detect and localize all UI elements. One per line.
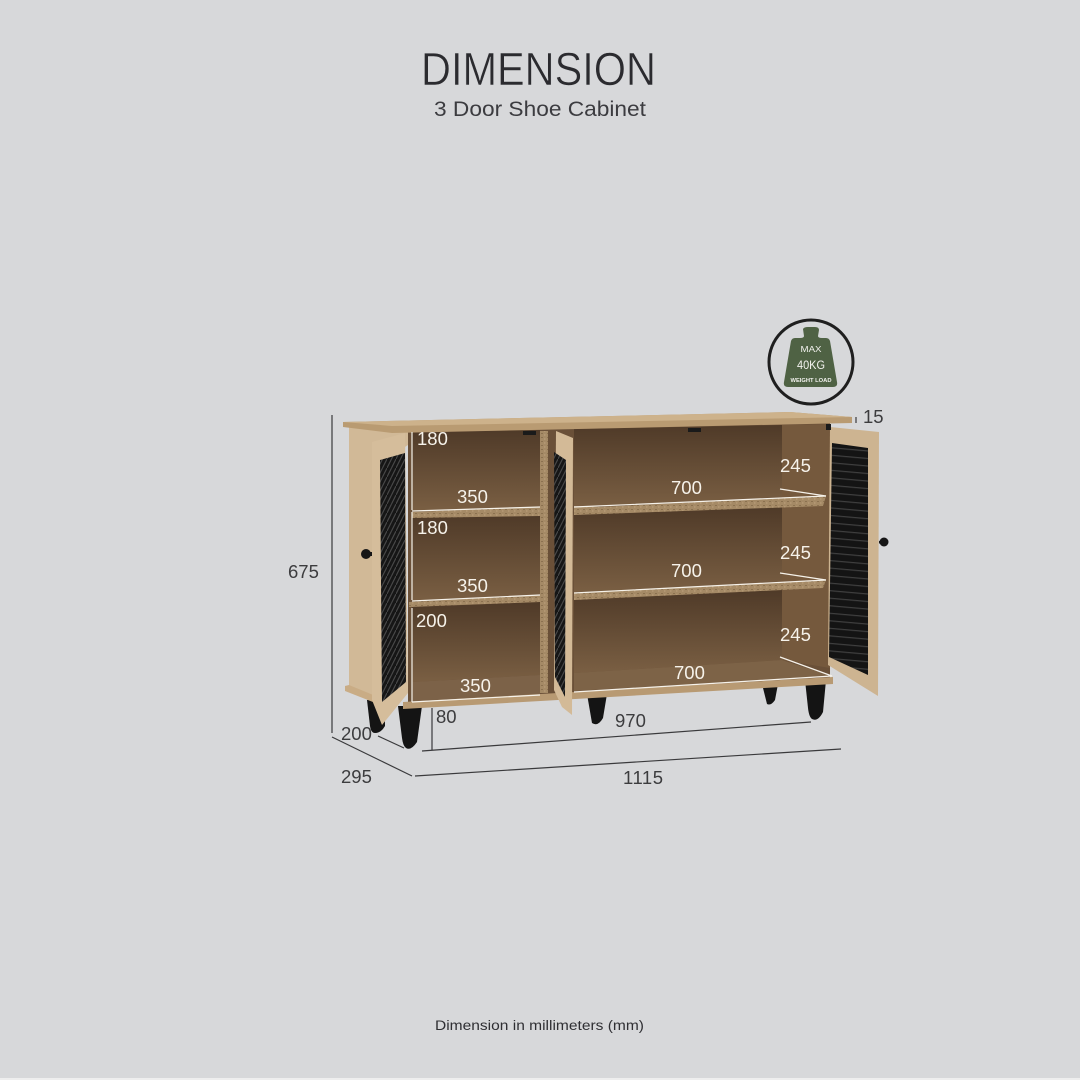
bottom board bbox=[403, 677, 833, 709]
interior shading, upper compartments bbox=[412, 430, 540, 511]
interior back wall bbox=[408, 423, 830, 706]
subtitle: 3 Door Shoe Cabinet bbox=[434, 98, 646, 121]
white shelf height labels: 245 bbox=[780, 624, 811, 645]
bottom left plinth bbox=[345, 685, 378, 704]
white shelf height labels: 350 bbox=[457, 575, 488, 596]
white shelf height labels: 180 bbox=[417, 517, 448, 538]
overall dimension labels: 970 bbox=[615, 710, 646, 731]
overall dimension labels: 15 bbox=[863, 406, 884, 427]
top hinge clips bbox=[523, 424, 831, 435]
white shelf height labels: 700 bbox=[671, 560, 702, 581]
overall dimension labels: 675 bbox=[288, 561, 319, 582]
back left leg bbox=[367, 700, 385, 733]
right door louver panel bbox=[829, 443, 868, 675]
footer note: Dimension in millimeters (mm) bbox=[435, 1018, 644, 1033]
white shelf height labels: 700 bbox=[671, 477, 702, 498]
back right leg bbox=[762, 684, 778, 704]
left side panel bbox=[349, 427, 408, 700]
right knob bbox=[879, 538, 888, 546]
right bay floor bbox=[574, 660, 832, 691]
interior shading, middle left compartment bbox=[412, 515, 540, 601]
center divider bbox=[540, 431, 548, 693]
dimension lines bbox=[332, 415, 856, 776]
white measure lines bbox=[412, 432, 832, 702]
icon: max 40kg weight load badge: 40KG bbox=[797, 360, 825, 372]
overall dimension labels: 295 bbox=[341, 766, 372, 787]
right door bbox=[828, 427, 879, 696]
center door bbox=[554, 431, 573, 715]
white shelf height labels: 245 bbox=[780, 455, 811, 476]
overall dimension labels: 1115 bbox=[623, 767, 663, 788]
front left leg bbox=[398, 706, 422, 749]
top board bbox=[343, 412, 852, 433]
left door bbox=[372, 433, 408, 725]
front right leg bbox=[805, 680, 826, 720]
interior shading, lower right compartment bbox=[574, 590, 782, 673]
overall dimension labels bbox=[288, 406, 884, 788]
icon: max 40kg weight load badge: WEIGHT LOAD bbox=[790, 378, 832, 384]
right bay shelf 2 bbox=[574, 580, 826, 600]
right bay shelf 1 bbox=[574, 496, 826, 515]
left bay shelf 1 bbox=[412, 507, 540, 518]
left bay floor bbox=[412, 675, 540, 702]
white shelf height labels: 350 bbox=[457, 486, 488, 507]
center leg bbox=[587, 694, 607, 724]
overall dimension labels: 200 bbox=[341, 723, 372, 744]
center door woven panel bbox=[554, 452, 566, 697]
right interior side wall bbox=[782, 424, 830, 668]
left bay shelf 2 bbox=[409, 595, 540, 607]
white shelf height labels bbox=[416, 428, 811, 696]
left knob bbox=[361, 549, 372, 559]
white shelf height labels: 245 bbox=[780, 542, 811, 563]
title: DIMENSION bbox=[421, 43, 656, 95]
white shelf height labels: 180 bbox=[417, 428, 448, 449]
overall dimension labels: 80 bbox=[436, 706, 457, 727]
white shelf height labels: 700 bbox=[674, 662, 705, 683]
white shelf height labels: 200 bbox=[416, 610, 447, 631]
left door woven panel bbox=[380, 453, 406, 702]
interior shading, lower left compartment bbox=[412, 602, 540, 682]
white shelf height labels: 350 bbox=[460, 675, 491, 696]
icon: max 40kg weight load badge: MAX bbox=[800, 344, 822, 354]
interior shading, upper right compartment bbox=[574, 425, 782, 507]
cabinet illustration bbox=[343, 412, 888, 749]
interior shading, middle right compartment bbox=[574, 507, 782, 593]
icon: max 40kg weight load badge bbox=[769, 320, 853, 404]
